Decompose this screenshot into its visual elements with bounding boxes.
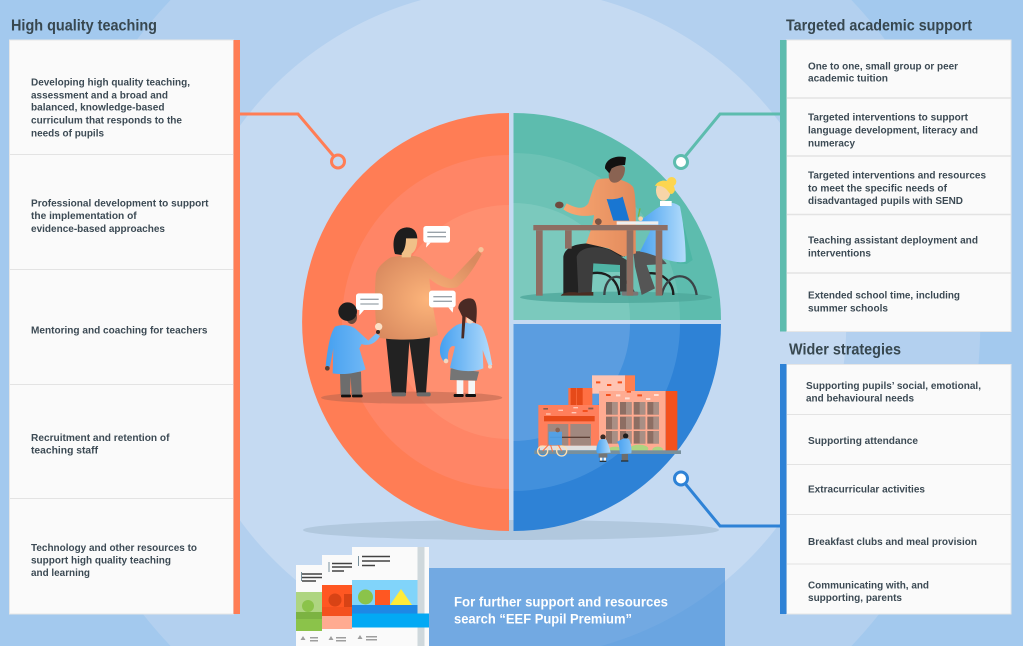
item: professional development: the implementation of bbox=[31, 210, 137, 222]
heading: high quality teaching: High quality teaching bbox=[11, 18, 157, 34]
illustration: school building bbox=[534, 375, 681, 462]
item: recruitment: teaching staff bbox=[31, 444, 98, 456]
item: SEND bbox=[808, 170, 986, 207]
item: communicating with parents: Communicating with, and bbox=[808, 580, 929, 592]
item: recruitment: Recruitment and retention of bbox=[31, 432, 170, 444]
heading: wider strategies: Wider strategies bbox=[789, 342, 901, 358]
item: technology: support high quality teaching bbox=[31, 554, 171, 566]
panel: targeted academic support bbox=[780, 40, 1011, 332]
item: professional development: evidence-based approaches bbox=[31, 223, 165, 235]
pupils outside school bbox=[596, 433, 632, 462]
speech bubble: teacher bbox=[423, 226, 450, 248]
item: technology: Technology and other resources to bbox=[31, 542, 197, 554]
item: developing teaching: needs of pupils bbox=[31, 128, 104, 140]
item: extracurricular: Extracurricular activities bbox=[808, 484, 925, 496]
speech bubble: boy bbox=[356, 293, 383, 315]
item: tuition bbox=[808, 60, 958, 84]
item: social and emotional needs: and behavioural needs bbox=[806, 392, 914, 404]
item: teaching assistants: interventions bbox=[808, 248, 871, 260]
item: extended school time: summer schools bbox=[808, 302, 888, 314]
item: breakfast clubs: Breakfast clubs and meal provision bbox=[808, 536, 977, 548]
item: SEND: to meet the specific needs of bbox=[808, 182, 947, 194]
icon: stack of guidance reports bbox=[296, 547, 429, 646]
item: developing teaching: assessment and a broad and bbox=[31, 90, 168, 102]
callout: further support box: For further support and resources bbox=[454, 594, 668, 610]
item: developing teaching: curriculum that responds to the bbox=[31, 114, 182, 126]
item: extended school time: Extended school time, including bbox=[808, 290, 960, 302]
illustration: adult and pupil at desk bbox=[520, 157, 712, 303]
girl pupil bbox=[440, 298, 492, 397]
panel: high quality teaching bbox=[10, 40, 240, 614]
cyclist bbox=[538, 428, 567, 456]
report: blue bbox=[352, 547, 429, 646]
item: teaching assistants bbox=[808, 234, 978, 260]
item: extended school time bbox=[808, 290, 960, 314]
item: SEND: disadvantaged pupils with SEND bbox=[808, 195, 963, 207]
item: language interventions: language development, literacy and bbox=[808, 124, 978, 136]
boy pupil bbox=[325, 302, 380, 397]
callout: further support box bbox=[429, 568, 725, 646]
item: technology: and learning bbox=[31, 567, 90, 579]
item: communicating with parents bbox=[808, 580, 929, 604]
item: professional development: Professional development to support bbox=[31, 198, 209, 210]
item: tuition: academic tuition bbox=[808, 72, 888, 84]
heading: targeted academic support: Targeted academic support bbox=[786, 18, 972, 34]
item: language interventions: Targeted interventions to support bbox=[808, 112, 968, 124]
item: developing teaching bbox=[31, 76, 190, 140]
item: language interventions: numeracy bbox=[808, 138, 855, 150]
panel: wider strategies bbox=[780, 364, 1011, 614]
item: social and emotional needs: Supporting pupils’ social, emotional, bbox=[806, 380, 981, 392]
report: orange bbox=[322, 555, 356, 646]
connector: wider strategies bbox=[674, 472, 780, 526]
connector: high quality teaching bbox=[240, 114, 344, 168]
item: teaching assistants: Teaching assistant deployment and bbox=[808, 234, 978, 246]
connector: targeted academic support bbox=[674, 114, 780, 168]
item: mentoring: Mentoring and coaching for teachers bbox=[31, 324, 208, 336]
item: professional development bbox=[31, 198, 209, 235]
item: developing teaching: Developing high quality teaching, bbox=[31, 76, 190, 88]
item: developing teaching: balanced, knowledge-based bbox=[31, 102, 164, 114]
report: green bbox=[296, 565, 326, 646]
callout: further support box: search “EEF Pupil Premium” bbox=[454, 612, 632, 626]
item: communicating with parents: supporting, parents bbox=[808, 592, 902, 604]
quadrant: wider strategies (blue) bbox=[514, 324, 721, 531]
item: SEND: Targeted interventions and resources bbox=[808, 170, 986, 182]
item: social and emotional needs bbox=[806, 380, 981, 404]
quadrant: high quality teaching (orange half) bbox=[302, 113, 509, 531]
item: tuition: One to one, small group or peer bbox=[808, 60, 958, 72]
illustration: teacher with two pupils bbox=[321, 226, 502, 404]
quadrant: targeted academic support (teal) bbox=[514, 113, 721, 320]
item: recruitment bbox=[31, 432, 170, 456]
item: technology bbox=[31, 542, 197, 579]
item: language interventions bbox=[808, 112, 978, 150]
item: attendance: Supporting attendance bbox=[808, 435, 918, 447]
pie shadow bbox=[303, 520, 719, 540]
speech bubble: girl bbox=[429, 291, 456, 313]
